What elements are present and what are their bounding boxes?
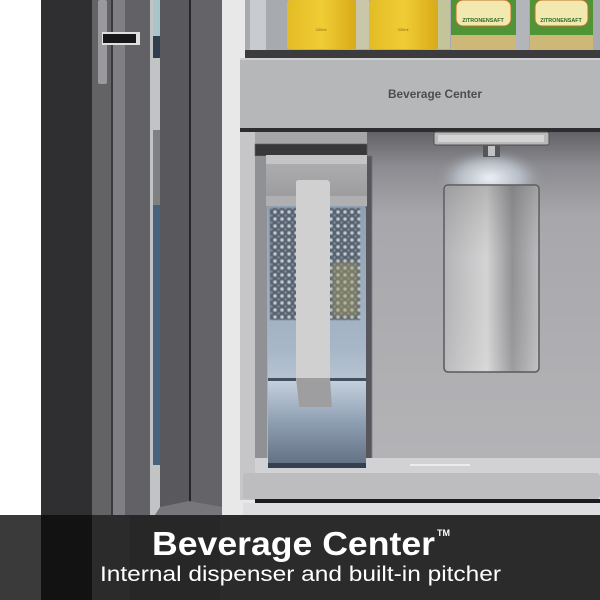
bottle: lemon juice 2 [369,0,438,49]
subheading: Internal dispenser and built-in pitcher [100,563,501,586]
pitcher handle [296,180,332,407]
bottle: lemon juice 2: 330ml [398,27,409,32]
white fridge cabinet wall [222,0,600,515]
bottle: Zitronensaft 1 [451,0,516,50]
beverage center label panel [240,58,600,128]
heading: Beverage Center [152,525,435,562]
stainless drip plate [444,185,539,372]
upper shelf with bottles [245,0,600,58]
dispenser compartment [240,132,600,500]
open door: left edge panels [41,0,222,515]
bottle: Zitronensaft 1: ZITRONENSAFT [462,18,505,24]
water dispenser nozzle [434,132,549,206]
panel label: Beverage Center [388,87,482,101]
bottle: lemon juice 1: 330ml [316,27,327,32]
bottle: Zitronensaft 2: ZITRONENSAFT [540,18,583,24]
drip tray [243,458,600,515]
caption band [0,515,600,600]
pitcher body [268,206,366,468]
pitcher [266,155,367,468]
bottle: Zitronensaft 2 [530,0,593,50]
door lower corner [155,501,222,515]
pitcher lid [266,155,367,207]
door latch and handle [98,0,140,84]
bottle: lemon juice 1 [287,0,356,49]
trademark: TM [437,528,450,538]
